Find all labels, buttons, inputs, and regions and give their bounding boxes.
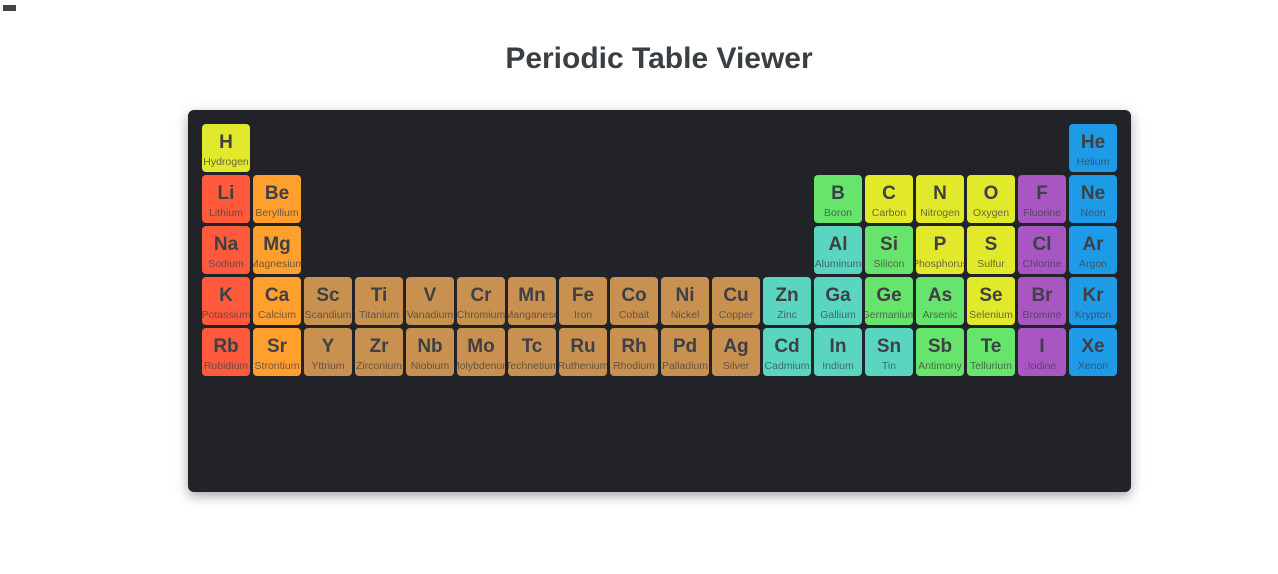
panel: periodic table: Beryllium <box>255 207 299 219</box>
panel: periodic table: I <box>1039 336 1045 357</box>
panel: periodic table: Mg <box>263 234 291 255</box>
panel: periodic table: O <box>984 183 998 204</box>
panel: periodic table: Argon <box>1079 258 1107 270</box>
panel: periodic table: Potassium <box>202 309 250 321</box>
panel: periodic table: Ar <box>1082 234 1104 255</box>
panel: periodic table: Xe <box>1081 336 1105 357</box>
panel: periodic table: V <box>424 285 436 306</box>
panel: periodic table: Sn <box>877 336 901 357</box>
panel: periodic table: In <box>830 336 846 357</box>
panel: periodic table: Indium <box>822 360 854 372</box>
panel: periodic table: Ti <box>371 285 387 306</box>
panel: periodic table: Be <box>265 183 289 204</box>
panel: periodic table: Sb <box>928 336 952 357</box>
panel: periodic table: Nb <box>417 336 443 357</box>
panel: periodic table: N <box>933 183 947 204</box>
panel: periodic table: Rhodium <box>613 360 655 372</box>
panel: periodic table: As <box>928 285 952 306</box>
panel: periodic table: Hydrogen <box>203 156 249 168</box>
panel: periodic table: Kr <box>1082 285 1104 306</box>
icon: top-left <box>3 5 16 11</box>
panel: periodic table: Cr <box>470 285 492 306</box>
panel: periodic table: Bromine <box>1022 309 1062 321</box>
panel: periodic table: Pd <box>673 336 697 357</box>
panel: periodic table: Se <box>979 285 1003 306</box>
panel: periodic table: Co <box>621 285 647 306</box>
panel: periodic table: Chromium <box>457 309 505 321</box>
panel: periodic table: Sc <box>316 285 340 306</box>
panel: periodic table: Xenon <box>1078 360 1108 372</box>
panel: periodic table: P <box>934 234 946 255</box>
panel: periodic table: Cobalt <box>619 309 649 321</box>
panel: periodic table: Calcium <box>258 309 296 321</box>
panel: periodic table: Zn <box>775 285 799 306</box>
panel: periodic table: Ca <box>265 285 289 306</box>
panel: periodic table: Palladium <box>662 360 708 372</box>
panel: periodic table: Niobium <box>411 360 449 372</box>
panel: periodic table: Y <box>322 336 334 357</box>
panel: periodic table: Vanadium <box>407 309 453 321</box>
panel: periodic table: Rh <box>621 336 647 357</box>
panel: periodic table: Scandium <box>305 309 351 321</box>
panel: periodic table: Rb <box>213 336 239 357</box>
panel: periodic table: Aluminum <box>815 258 861 270</box>
panel: periodic table: Strontium <box>255 360 299 372</box>
panel: periodic table: Boron <box>824 207 852 219</box>
panel: periodic table: Al <box>828 234 848 255</box>
panel: periodic table: Zirconium <box>356 360 402 372</box>
panel: periodic table: F <box>1036 183 1048 204</box>
panel: periodic table: Na <box>214 234 238 255</box>
panel: periodic table: Tc <box>522 336 542 357</box>
panel: periodic table: Ge <box>876 285 902 306</box>
panel: periodic table: Iron <box>574 309 592 321</box>
panel: periodic table: Mo <box>467 336 495 357</box>
panel: periodic table: Nitrogen <box>920 207 960 219</box>
panel: periodic table <box>188 110 1131 492</box>
panel: periodic table: Sulfur <box>977 258 1005 270</box>
panel: periodic table: Helium <box>1077 156 1109 168</box>
panel: periodic table: Sr <box>267 336 287 357</box>
panel: periodic table: Fe <box>572 285 594 306</box>
panel: periodic table: Ru <box>570 336 596 357</box>
panel: periodic table: Selenium <box>969 309 1013 321</box>
panel: periodic table: Cl <box>1032 234 1052 255</box>
panel: periodic table: Zinc <box>777 309 797 321</box>
title: Periodic Table Viewer <box>505 42 813 75</box>
panel: periodic table: Tin <box>882 360 896 372</box>
panel: periodic table: Silicon <box>874 258 904 270</box>
panel: periodic table: Nickel <box>671 309 699 321</box>
panel: periodic table: Cd <box>774 336 800 357</box>
panel: periodic table: Carbon <box>872 207 906 219</box>
panel: periodic table: Li <box>218 183 234 204</box>
panel: periodic table: Te <box>981 336 1001 357</box>
panel: periodic table: Si <box>880 234 898 255</box>
panel: periodic table: Yttrium <box>311 360 345 372</box>
panel: periodic table: Br <box>1031 285 1053 306</box>
panel: periodic table: Lithium <box>209 207 243 219</box>
panel: periodic table: Titanium <box>359 309 399 321</box>
panel: periodic table: Oxygen <box>973 207 1009 219</box>
panel: periodic table: Copper <box>719 309 753 321</box>
panel: periodic table: Rubidium <box>204 360 248 372</box>
panel: periodic table: Krypton <box>1075 309 1111 321</box>
panel: periodic table: Fluorine <box>1023 207 1061 219</box>
panel: periodic table: S <box>985 234 997 255</box>
panel: periodic table: Cu <box>723 285 749 306</box>
panel: periodic table: Antimony <box>918 360 962 372</box>
panel: periodic table: Ne <box>1081 183 1105 204</box>
panel: periodic table: Ag <box>723 336 749 357</box>
panel: periodic table: Silver <box>723 360 749 372</box>
panel: periodic table: Neon <box>1080 207 1106 219</box>
panel: periodic table: Gallium <box>820 309 856 321</box>
panel: periodic table: Zr <box>370 336 388 357</box>
panel: periodic table: Mn <box>518 285 546 306</box>
panel: periodic table: Cadmium <box>765 360 809 372</box>
panel: periodic table: Iodine <box>1028 360 1056 372</box>
panel: periodic table: Chlorine <box>1022 258 1062 270</box>
panel: periodic table: Ga <box>825 285 851 306</box>
panel: periodic table: C <box>882 183 896 204</box>
panel: periodic table: Arsenic <box>922 309 958 321</box>
panel: periodic table: H <box>219 132 233 153</box>
panel: periodic table: B <box>831 183 845 204</box>
panel: periodic table: Sodium <box>208 258 244 270</box>
panel: periodic table: Tellurium <box>970 360 1012 372</box>
panel: periodic table: Ni <box>676 285 694 306</box>
panel: periodic table: K <box>219 285 233 306</box>
panel: periodic table: He <box>1081 132 1105 153</box>
